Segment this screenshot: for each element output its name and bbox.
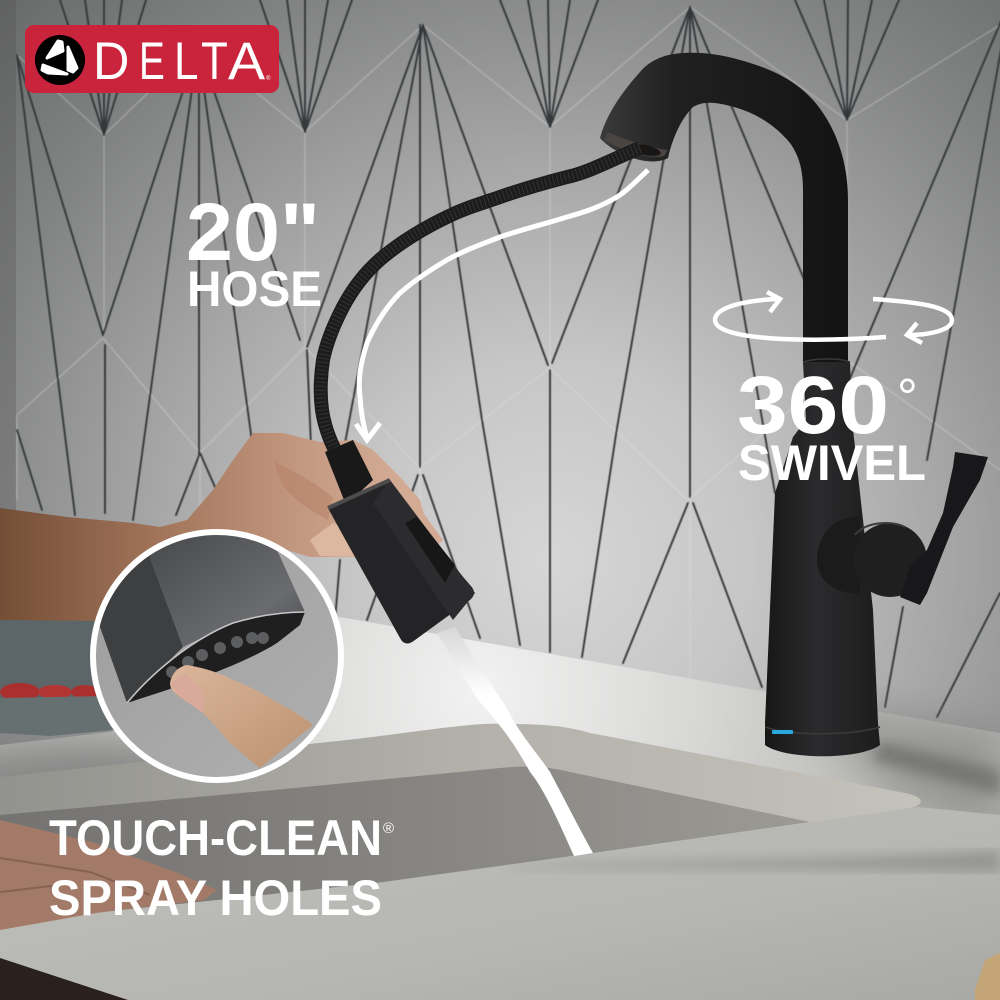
label: touch-clean spray holes: SPRAY HOLES	[49, 870, 382, 926]
faucet: spout and body	[600, 53, 880, 756]
logo: Delta: E	[139, 31, 165, 90]
logo: Delta: T	[201, 32, 228, 91]
logo: Delta	[25, 25, 279, 93]
logo: Delta: A	[228, 31, 266, 91]
label: 20 inch hose: HOSE	[187, 261, 322, 317]
logo: Delta: ®	[266, 75, 271, 82]
label: 360 degree swivel: SWIVEL	[738, 435, 926, 491]
label: 360 degree swivel	[737, 360, 926, 491]
front counter shadows and edge	[0, 742, 1000, 1000]
water stream	[437, 627, 593, 856]
bowl of raspberries	[0, 620, 115, 736]
logo: Delta: D	[93, 31, 129, 90]
hose	[321, 148, 640, 460]
label: touch-clean spray holes: TOUCH-CLEAN	[49, 810, 382, 866]
spray head	[325, 440, 475, 644]
label: touch-clean spray holes: ®	[383, 820, 394, 837]
label: touch-clean spray holes	[49, 810, 394, 926]
inset circle: touch-clean spray holes	[85, 530, 341, 780]
label: 20 inch hose: 20"	[186, 187, 320, 278]
hand resting on sink	[0, 820, 217, 930]
swivel arrows	[715, 292, 952, 343]
label: 20 inch hose	[186, 187, 322, 317]
label: 360 degree swivel: 360	[737, 360, 889, 451]
arrow along hose	[356, 170, 648, 440]
wall background	[0, 0, 1000, 800]
hand holding spray head	[0, 433, 443, 621]
kitchen counter	[0, 617, 1000, 1000]
logo: Delta: L	[174, 32, 198, 91]
undermount sink	[0, 724, 921, 925]
label: 360 degree swivel: °	[897, 369, 918, 427]
wall tile pattern	[17, 0, 1000, 717]
faucet handle lever	[853, 452, 988, 605]
